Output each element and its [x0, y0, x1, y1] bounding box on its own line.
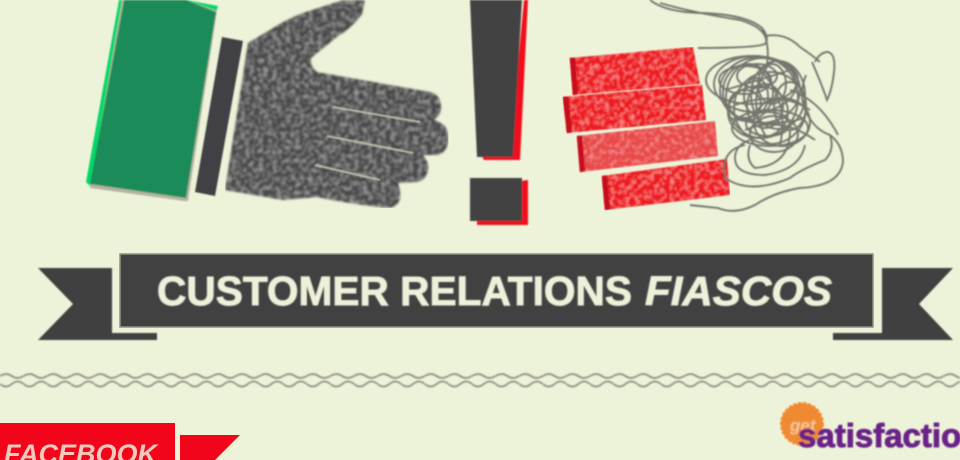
section tag: Facebook	[0, 423, 240, 460]
title: FIASCOS	[645, 268, 832, 314]
title: CUSTOMER RELATIONS	[157, 268, 632, 314]
logo badge	[781, 403, 823, 445]
logo: Get Satisfaction	[781, 403, 960, 454]
icon: dark shirt cuff band	[195, 37, 243, 196]
logo word: get: get	[789, 416, 817, 435]
finger lines	[315, 107, 420, 180]
icon: exclamation mark	[470, 0, 528, 225]
ribbon right tail	[833, 268, 953, 340]
icon: tangled fuse wire	[650, 0, 843, 211]
icon: green jacket cuff	[86, 0, 218, 201]
wavy divider	[0, 370, 960, 392]
ribbon banner	[38, 254, 953, 340]
icon: dynamite sticks	[563, 47, 730, 210]
icon: grey hand	[225, 0, 448, 208]
tag band	[0, 423, 175, 460]
dynamite shading	[563, 58, 610, 210]
ribbon main band	[120, 254, 873, 327]
ribbon left tail	[38, 268, 157, 340]
tag tail	[180, 435, 240, 460]
